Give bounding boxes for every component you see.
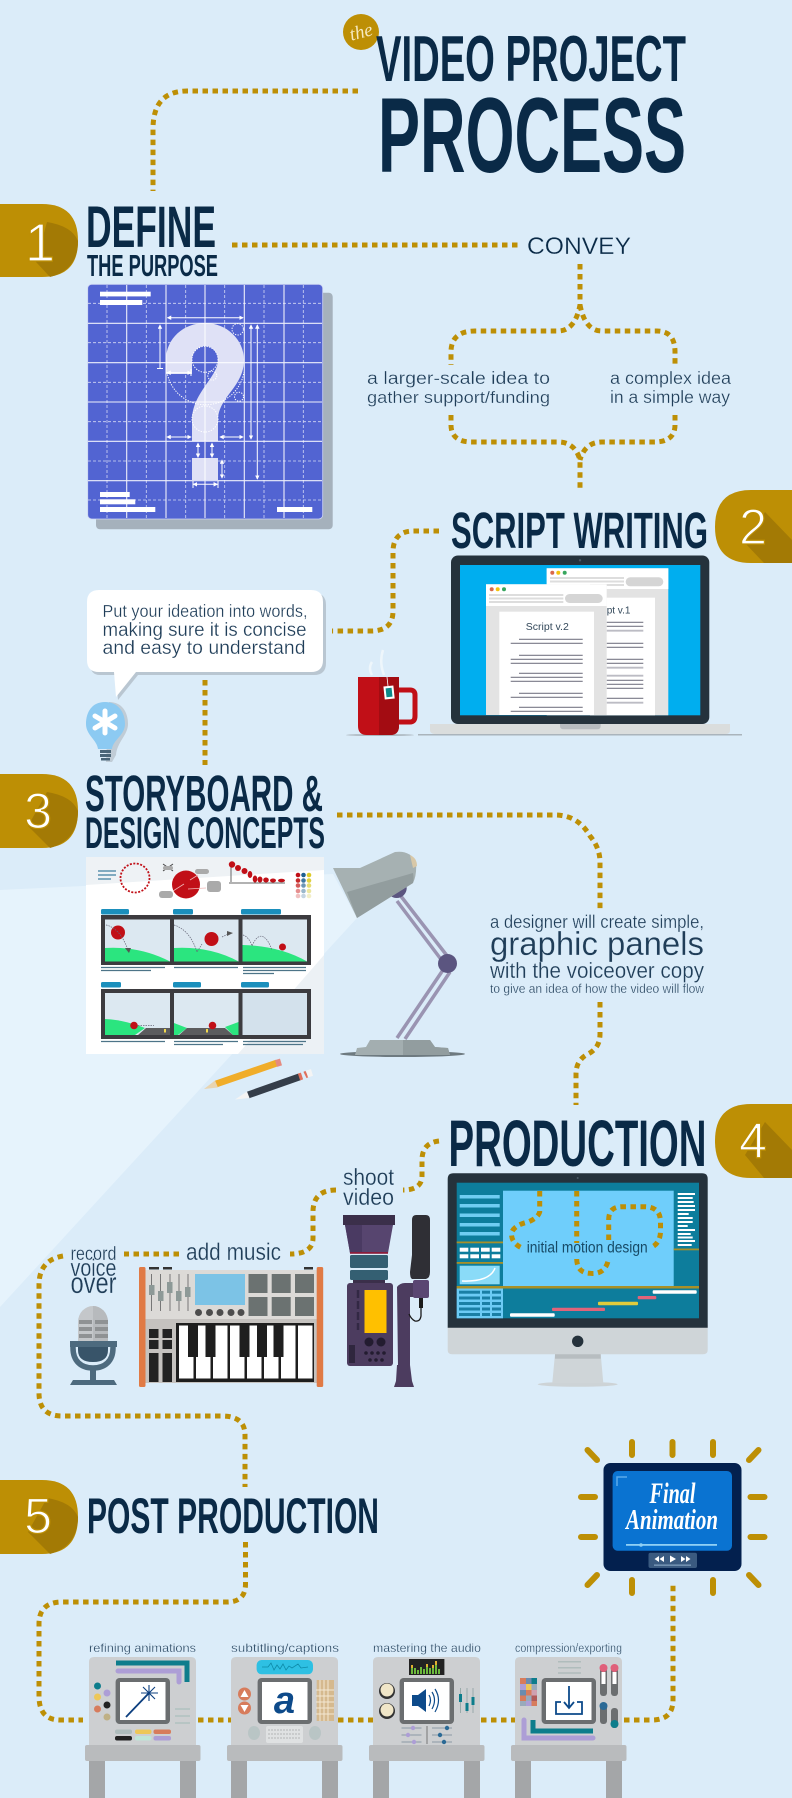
text: graphic panels: with the voiceover copy (489, 958, 704, 983)
front window: script v.2: Script v.2 (526, 621, 569, 633)
heading: define the purpose: DEFINE (86, 195, 216, 260)
convey label: CONVEY (527, 233, 631, 260)
icon: download tray (556, 1686, 582, 1714)
step 5 badge (0, 1480, 78, 1554)
icon: laptop with script windows (418, 556, 742, 736)
final animation title: Animation (625, 1504, 718, 1536)
station: refining animations (85, 1641, 200, 1798)
text: graphic panels: a designer will create simple, (490, 911, 704, 932)
station: mastering the audio: mastering the audio (373, 1641, 481, 1655)
station: mastering the audio (369, 1641, 484, 1798)
heading: storyboard and design concepts: DESIGN CONCEPTS (85, 809, 325, 858)
connector: voice over to post production (39, 1256, 245, 1487)
step 4 badge: 4 (739, 1113, 767, 1169)
right property panel (674, 1193, 699, 1250)
piano keys (176, 1323, 314, 1382)
step 2 badge: 2 (739, 499, 767, 555)
step 1 badge (0, 204, 78, 277)
connectors between stations (198, 1718, 515, 1722)
storyboard panels row 1 (101, 909, 311, 974)
connector: script writing to bubble (332, 531, 439, 631)
connector: title to step 1 (153, 91, 358, 191)
final animation title: Final (649, 1477, 696, 1510)
text: shoot video (343, 1164, 395, 1210)
bubble text: making sure it is concise (102, 620, 306, 641)
final animation title (625, 1477, 718, 1536)
text: graphic panels: to give an idea of how the video will flow (490, 982, 705, 996)
icon: video camera (343, 1215, 430, 1387)
station: refining animations: refining animations (89, 1641, 196, 1655)
heading: storyboard and design concepts (85, 765, 325, 858)
icon: light bulb (86, 702, 128, 762)
connector: step 3 to panels text (337, 815, 600, 909)
icon: pencil and pen (204, 1062, 312, 1100)
step 2 badge (715, 490, 792, 563)
icon: microphone (70, 1306, 117, 1385)
speech bubble (87, 590, 326, 700)
station: subtitling and captions: subtitling/captions (231, 1641, 339, 1655)
icon: letter a: a (274, 1680, 295, 1722)
text: larger-scale idea: a larger-scale idea to (367, 368, 550, 388)
step 3 badge: 3 (24, 783, 52, 839)
heading: storyboard and design concepts: STORYBOARD & (85, 765, 323, 822)
icon: magic wand (126, 1685, 158, 1717)
step 4 badge (715, 1104, 792, 1178)
left tool panel (457, 1195, 503, 1284)
connector: stations to final animation (624, 1582, 673, 1720)
title (343, 14, 686, 195)
text: complex idea: a complex idea (610, 368, 731, 388)
text: larger-scale idea: gather support/funding (367, 388, 550, 407)
storyboard sheet (86, 857, 324, 1054)
dotted motion path (511, 1191, 660, 1273)
text: add music: add music (186, 1239, 281, 1266)
text: record voice over (70, 1244, 117, 1300)
heading: post production: POST PRODUCTION (87, 1488, 379, 1544)
bubble text (102, 601, 308, 659)
connector: panels text to production (576, 1002, 600, 1105)
text: initial motion design: initial motion design (527, 1239, 648, 1256)
text: record voice over: voice (70, 1255, 116, 1282)
icon: imac with motion design (448, 1173, 708, 1387)
step 5 badge: 5 (24, 1488, 52, 1544)
back window: script v.1 (547, 568, 668, 715)
step 1 badge: 1 (25, 213, 55, 273)
text: record voice over: over (70, 1267, 117, 1300)
text: larger-scale idea (367, 368, 550, 407)
station: subtitling and captions (227, 1641, 342, 1798)
text: shoot video: shoot (343, 1164, 395, 1190)
icon: desk lamp (333, 852, 465, 1057)
front window: script v.2 (486, 584, 607, 715)
icon: speaker (412, 1689, 438, 1712)
text: graphic panels: graphic panels (490, 925, 704, 962)
text: complex idea: in a simple way (610, 387, 730, 407)
player controls (648, 1553, 697, 1568)
brace connectors (451, 264, 675, 491)
lamp light beam (0, 874, 357, 1307)
title badge: the: the (347, 19, 375, 46)
connector: define to convey (232, 242, 519, 248)
blueprint illustration: question mark (88, 284, 333, 529)
drum pads (248, 1274, 314, 1316)
station: compression and exporting: compression/exporting (515, 1643, 622, 1655)
text: shoot video: video (343, 1184, 394, 1210)
text: graphic panels (489, 911, 705, 996)
step 3 badge (0, 774, 78, 848)
text: complex idea (610, 368, 731, 407)
station: compression and exporting (511, 1643, 626, 1798)
radiating rays (581, 1442, 764, 1593)
question mark glyph shape (166, 323, 244, 480)
concept sketches row (98, 861, 311, 898)
bubble text: and easy to understand (102, 638, 306, 659)
icon: red mug (346, 650, 415, 736)
connector: production to shoot video (403, 1141, 439, 1190)
connector: shoot video to add music (290, 1190, 336, 1254)
bubble text: Put your ideation into words, (102, 601, 308, 621)
title badge: the (343, 14, 379, 50)
back window: script v.1: pt v.1 (607, 605, 631, 616)
connector: add music to record voice over (124, 1252, 179, 1256)
connector: bubble to step 3 (202, 680, 208, 765)
timeline (457, 1288, 697, 1318)
heading: define the purpose: THE PURPOSE (87, 249, 218, 283)
connector: post production to stations (39, 1542, 246, 1720)
text: record voice over: record (70, 1244, 116, 1265)
heading: define the purpose (86, 195, 218, 283)
storyboard panels row 2 (101, 982, 311, 1044)
icon: midi keyboard (139, 1267, 323, 1387)
faders (149, 1274, 190, 1311)
icon: final animation screen (581, 1442, 764, 1593)
